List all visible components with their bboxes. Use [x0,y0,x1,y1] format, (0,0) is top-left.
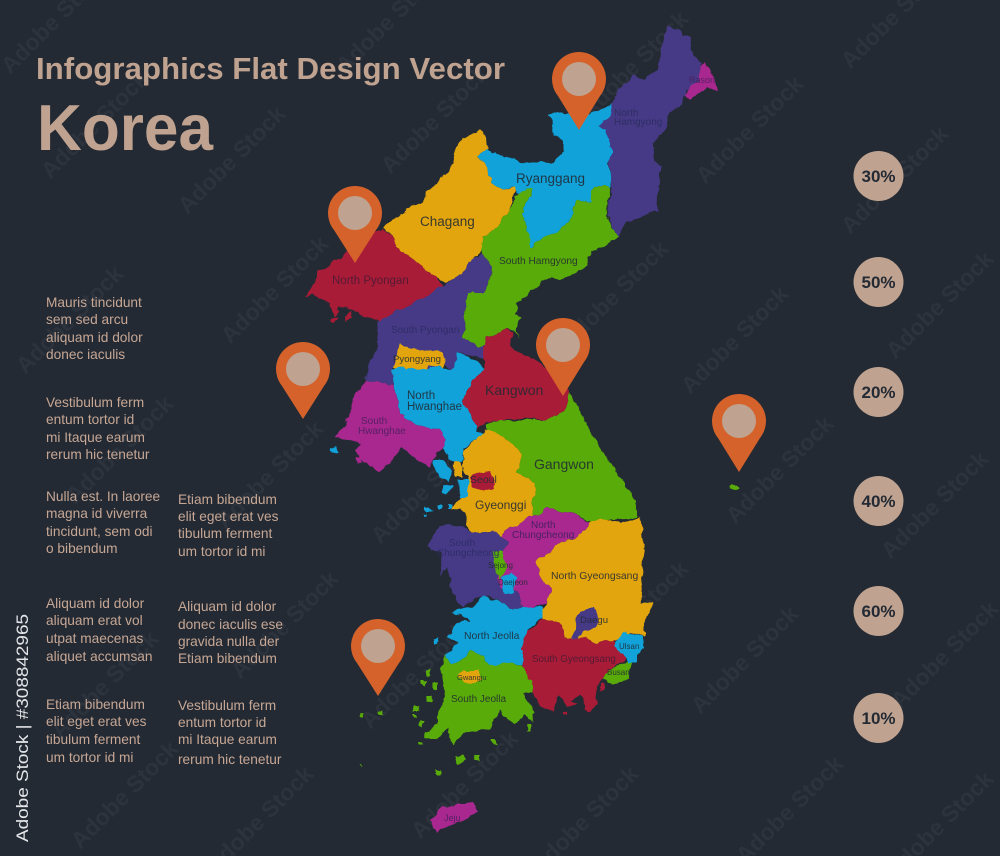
region: Chagang [383,131,515,282]
text block 4: Aliquam id dolor [46,596,145,611]
region: Ryanggang [478,105,613,247]
text block 3: magna id viverra [46,506,148,521]
badge 50%: 50% [861,273,896,292]
map labels: Daegu [580,615,608,626]
text block 4: utpat maecenas [46,631,144,646]
region: South Jeolla [359,652,535,774]
map labels: Jeju [444,813,461,823]
text block 4 [46,596,153,664]
stock id: Adobe Stock | #308842965 [13,614,32,842]
map labels: Seoul [470,474,497,486]
text: Adobe Stock [720,410,838,528]
region: Jeju [430,803,478,832]
text block 5 [46,697,147,765]
text: Adobe Stock [35,65,153,183]
text block 7 [178,599,283,666]
map labels: North Pyongan [332,275,409,287]
text block 6 [178,492,279,559]
text block 1: donec iaculis [46,347,125,362]
badge 30% [854,151,904,201]
text block 6: tibulum ferment [178,526,273,541]
map labels: Chungcheong [512,530,574,541]
region: South Pyongan [365,253,493,387]
pin: west sea [276,342,330,419]
text: Adobe Stock [685,600,803,718]
map labels: Rason [689,75,715,85]
region: North Hwanghae [392,353,485,465]
map labels: North [407,390,435,402]
text: Adobe Stock [835,120,953,238]
badge 60% [854,586,904,636]
text block 8: mi Itaque earum [178,732,277,747]
text block 7: Etiam bibendum [178,651,277,666]
region: Ulleungdo island [730,484,740,490]
badge 40%: 40% [861,492,896,511]
map labels: South Jeolla [451,694,506,705]
text block 7: donec iaculis ese [178,617,283,632]
region: South Hwanghae [335,380,447,472]
region: Gwangju [457,670,483,685]
text block 3: o bibendum [46,541,118,556]
text block 1: aliquam id dolor [46,330,143,345]
region: North Hamgyong [598,27,702,237]
badge 20% [854,367,904,417]
text block 2: mi Itaque earum [46,430,145,445]
region: Gangwon [487,392,637,525]
map labels: Kangwon [485,382,543,398]
text block 5: tibulum ferment [46,732,141,747]
text: Adobe Stock [10,260,128,378]
text block 3 [46,489,160,556]
text: Adobe Stock [172,100,290,218]
region: Daegu [572,608,598,638]
text: Adobe Stock [45,625,163,743]
text block 2: Vestibulum ferm [46,395,144,410]
map labels: South [449,538,475,549]
map labels: South Pyongan [391,325,459,336]
map labels: Daejeon [498,578,528,587]
text block 1: Mauris tincidunt [46,295,142,310]
map labels: Busan [607,668,630,677]
map labels: Ulsan [619,642,639,651]
text: Adobe Stock [210,415,328,533]
map labels [332,75,715,823]
region: South Hamgyong [463,185,618,347]
region: North Pyongan [305,228,443,323]
text block 2: rerum hic tenetur [46,447,150,462]
map labels: Chungcheong [437,548,499,559]
map labels: Ryanggang [516,171,585,186]
region: North Chungcheong [497,508,590,608]
map labels: South Hamgyong [499,256,578,267]
text: Adobe Stock [365,430,483,548]
text block 6: elit eget erat ves [178,509,279,524]
region: Daejeon [502,572,517,593]
map labels: Gyeonggi [475,498,526,512]
region: Seoul [470,470,495,492]
text: Adobe Stock [880,245,998,363]
map labels: North Jeolla [464,631,520,642]
map of Korea [305,27,740,832]
text: Adobe Stock [405,725,523,843]
region: South Chungcheong [427,525,523,610]
text: Adobe Stock [60,390,178,508]
text block 8: entum tortor id [178,715,266,730]
pin: north [552,52,606,130]
map labels: North Gyeongsang [551,571,638,582]
text block 7: gravida nulla der [178,634,280,649]
region: Kangwon [463,330,570,430]
region: South Gyeongsang [523,618,628,715]
badge 20%: 20% [861,383,896,402]
text: Adobe Stock [675,280,793,398]
text block 3: tincidunt, sem odi [46,524,153,539]
badge 60%: 60% [861,602,896,621]
badge 50% [854,257,904,307]
map labels: Gwangju [457,673,487,682]
title [36,51,505,164]
region: Sejong [493,552,507,580]
title: Infographics Flat Design Vector [36,51,505,86]
pin: Kangwon [536,318,590,396]
region: Gyeonggi [450,430,537,535]
map labels: Pyongyang [393,354,441,365]
text block 4: aliquet accumsan [46,649,153,664]
map labels: Chagang [420,214,475,229]
text: Adobe Stock [225,565,343,683]
pin: east sea [712,394,766,472]
title: Korea [37,91,214,164]
text block 8: rerum hic tenetur [178,752,282,767]
region: Busan [602,660,632,685]
text block 2 [46,395,150,462]
text block 8: Vestibulum ferm [178,698,276,713]
pin: North Pyongan [328,186,382,263]
region: Pyongyang [393,343,444,376]
percent badges [854,151,904,743]
map labels: North [531,520,555,531]
text block 6: Etiam bibendum [178,492,277,507]
text: Adobe Stock [355,615,473,733]
text block 2: entum tortor id [46,412,134,427]
map labels: Hwanghae [407,401,462,413]
text: Adobe Stock [215,230,333,348]
pin: south west [351,619,405,696]
text block 1 [46,295,143,362]
text: Adobe Stock [65,735,183,853]
badge 10%: 10% [861,709,896,728]
text block 1: sem sed arcu [46,312,128,327]
text block 5: um tortor id mi [46,750,133,765]
badge 40% [854,476,904,526]
text: Adobe Stock [575,5,693,123]
text: Adobe Stock [555,235,673,353]
text block 6: um tortor id mi [178,544,265,559]
map labels: Hamgyong [614,117,662,128]
region: Ulsan [615,632,643,662]
text block 5: elit eget erat ves [46,714,147,729]
text: Adobe Stock [690,70,808,188]
map labels: Hwanghae [358,426,406,437]
text block 7: Aliquam id dolor [178,599,277,614]
badge 10% [854,693,904,743]
text block 3: Nulla est. In laoree [46,489,160,504]
region: North Jeolla [434,597,542,665]
text: Adobe Stock [885,595,1000,713]
map labels: Gangwon [534,456,594,472]
map labels: North [614,108,638,119]
text block 4: aliquam erat vol [46,613,143,628]
badge 30%: 30% [861,167,896,186]
text block 5: Etiam bibendum [46,697,145,712]
map labels: South [361,416,387,427]
map labels: Sejong [488,561,513,570]
region: islands Incheon [330,446,468,516]
text: Adobe Stock [575,555,693,673]
text: Adobe Stock [375,60,493,178]
region: Rason [684,61,717,100]
text block 8 [178,698,282,767]
region: North Gyeongsang [537,517,652,643]
text: Adobe Stock [875,445,993,563]
map labels: South Gyeongsang [532,654,616,665]
